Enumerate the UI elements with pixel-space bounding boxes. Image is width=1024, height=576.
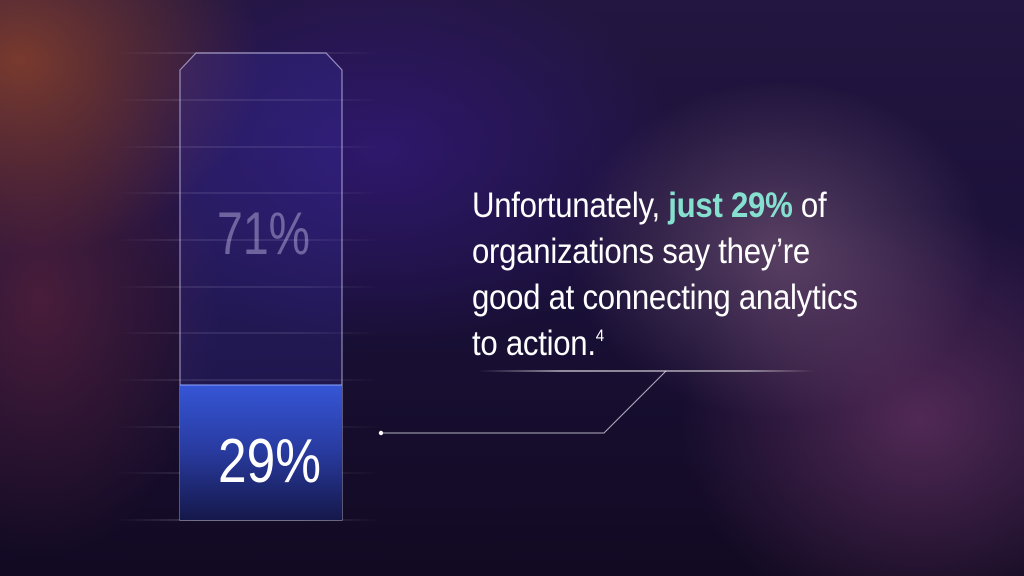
text block: Unfortunately, just 29% of <box>472 186 826 225</box>
bar: remaining 71% <box>180 53 342 520</box>
callout line <box>379 371 815 435</box>
text block <box>472 186 858 363</box>
bar: remaining 71%: 71% <box>217 200 310 267</box>
bar: 29% <box>180 385 342 520</box>
bar: 29%: 29% <box>218 427 321 496</box>
text block: good at connecting analytics <box>472 278 858 317</box>
text block: organizations say they’re <box>472 232 810 271</box>
text block: to action.4 <box>472 324 604 363</box>
